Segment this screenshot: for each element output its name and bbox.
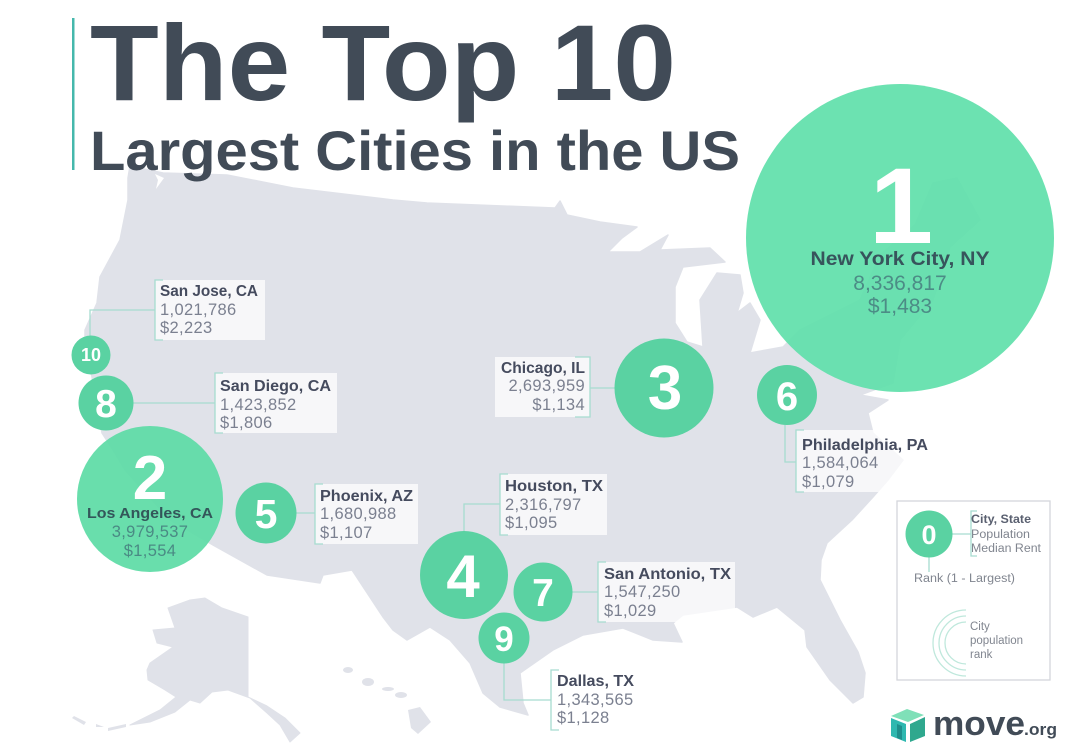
title: The Top 10 — [90, 2, 676, 123]
city 7: San Antonio — [514, 562, 735, 622]
city 9: Dallas: $1,128 — [557, 709, 610, 727]
city 2: Los Angeles: 3,979,537 — [112, 523, 188, 541]
city 9: Dallas: Dallas, TX — [557, 673, 635, 690]
legend: population — [970, 635, 1023, 647]
title — [90, 2, 740, 182]
map: Hawaii — [343, 667, 431, 734]
city 6: Philadelphia: Philadelphia, PA — [802, 437, 928, 454]
city 1: New York City: 1 — [870, 145, 930, 266]
legend: Median Rent — [971, 543, 1042, 555]
city 9: Dallas: 1,343,565 — [557, 691, 634, 709]
legend: rank — [970, 649, 993, 661]
title: Largest Cities in the US — [90, 119, 740, 182]
city 3: Chicago: 3 — [648, 354, 682, 423]
city 3: Chicago — [495, 338, 714, 438]
city 8: San Diego: 1,423,852 — [220, 396, 297, 414]
city 7: San Antonio: 1,547,250 — [604, 583, 681, 601]
city 10: San Jose: 1,021,786 — [160, 301, 237, 319]
city 7: San Antonio: San Antonio, TX — [604, 566, 732, 583]
city 2: Los Angeles: Los Angeles, CA — [87, 505, 213, 522]
city 4: Houston: $1,095 — [505, 514, 558, 532]
city 4: Houston: 2,316,797 — [505, 496, 582, 514]
legend: population rank arcs — [933, 610, 966, 676]
city 9: Dallas — [478, 612, 635, 730]
city 7: San Antonio: 7 — [532, 572, 554, 615]
legend — [897, 501, 1050, 680]
city 6: Philadelphia: 1,584,064 — [802, 454, 879, 472]
city 8: San Diego: $1,806 — [220, 414, 273, 432]
city 4: Houston: 4 — [446, 543, 480, 610]
city 9: Dallas: 9 — [494, 620, 514, 659]
city 2: Los Angeles: $1,554 — [124, 542, 176, 560]
logo: move.org: move — [933, 705, 1025, 743]
city 5: Phoenix: Phoenix, AZ — [320, 488, 414, 505]
city 10: San Jose — [72, 280, 265, 374]
city 1: New York City — [746, 84, 1054, 392]
legend: Rank (1 - Largest) — [914, 573, 1015, 585]
city 4: Houston: Houston, TX — [505, 478, 604, 495]
city 10: San Jose: 10 — [81, 345, 101, 365]
city 8: San Diego: 8 — [95, 383, 117, 426]
city 10: San Jose: $2,223 — [160, 319, 213, 337]
city 6: Philadelphia: $1,079 — [802, 473, 855, 491]
city 5: Phoenix: $1,107 — [320, 524, 373, 542]
logo: move.org: .org — [1024, 720, 1057, 739]
legend: 0 — [921, 520, 937, 550]
legend: Population — [971, 529, 1030, 541]
legend: City — [970, 621, 990, 633]
city 8: San Diego — [78, 373, 337, 433]
logo: move.org — [891, 705, 1057, 743]
city 5: Phoenix — [236, 482, 418, 544]
city 2: Los Angeles: 2 — [133, 444, 167, 513]
city 10: San Jose: San Jose, CA — [160, 283, 258, 300]
city 2: Los Angeles — [77, 426, 223, 572]
city 8: San Diego: San Diego, CA — [220, 378, 331, 395]
city 5: Phoenix: 5 — [255, 491, 277, 537]
icon: cube — [891, 709, 925, 742]
map: Puget Sound notch — [155, 174, 164, 189]
city 1: New York City: $1,483 — [868, 295, 932, 318]
city 6: Philadelphia: 6 — [776, 375, 798, 419]
city 3: Chicago: 2,693,959 — [508, 377, 585, 395]
city 1: New York City: 8,336,817 — [853, 272, 947, 295]
city 7: San Antonio: $1,029 — [604, 602, 657, 620]
map: Alaska — [130, 598, 300, 742]
city 6: Philadelphia — [757, 365, 928, 492]
city 3: Chicago: $1,134 — [532, 396, 585, 414]
map: Aleutian Islands — [72, 716, 126, 731]
title accent bar — [72, 18, 74, 170]
city 4: Houston — [420, 474, 607, 619]
city 1: New York City: New York City, NY — [810, 248, 990, 270]
map: contiguous United States — [85, 166, 980, 715]
legend: City, State — [971, 514, 1031, 526]
city 5: Phoenix: 1,680,988 — [320, 505, 397, 523]
city 3: Chicago: Chicago, IL — [501, 360, 585, 377]
